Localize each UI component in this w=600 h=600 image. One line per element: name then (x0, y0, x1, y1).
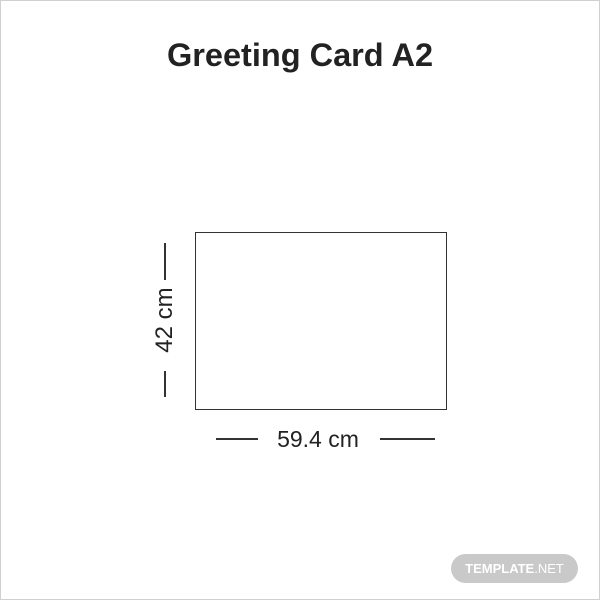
card rectangle (195, 232, 447, 410)
logo badge: TEMPLATE.NET (465, 561, 564, 576)
title: Greeting Card A2 (167, 37, 433, 73)
logo badge (451, 554, 578, 583)
width label: 59.4 cm (277, 426, 359, 452)
height label: 42 cm (151, 287, 178, 353)
